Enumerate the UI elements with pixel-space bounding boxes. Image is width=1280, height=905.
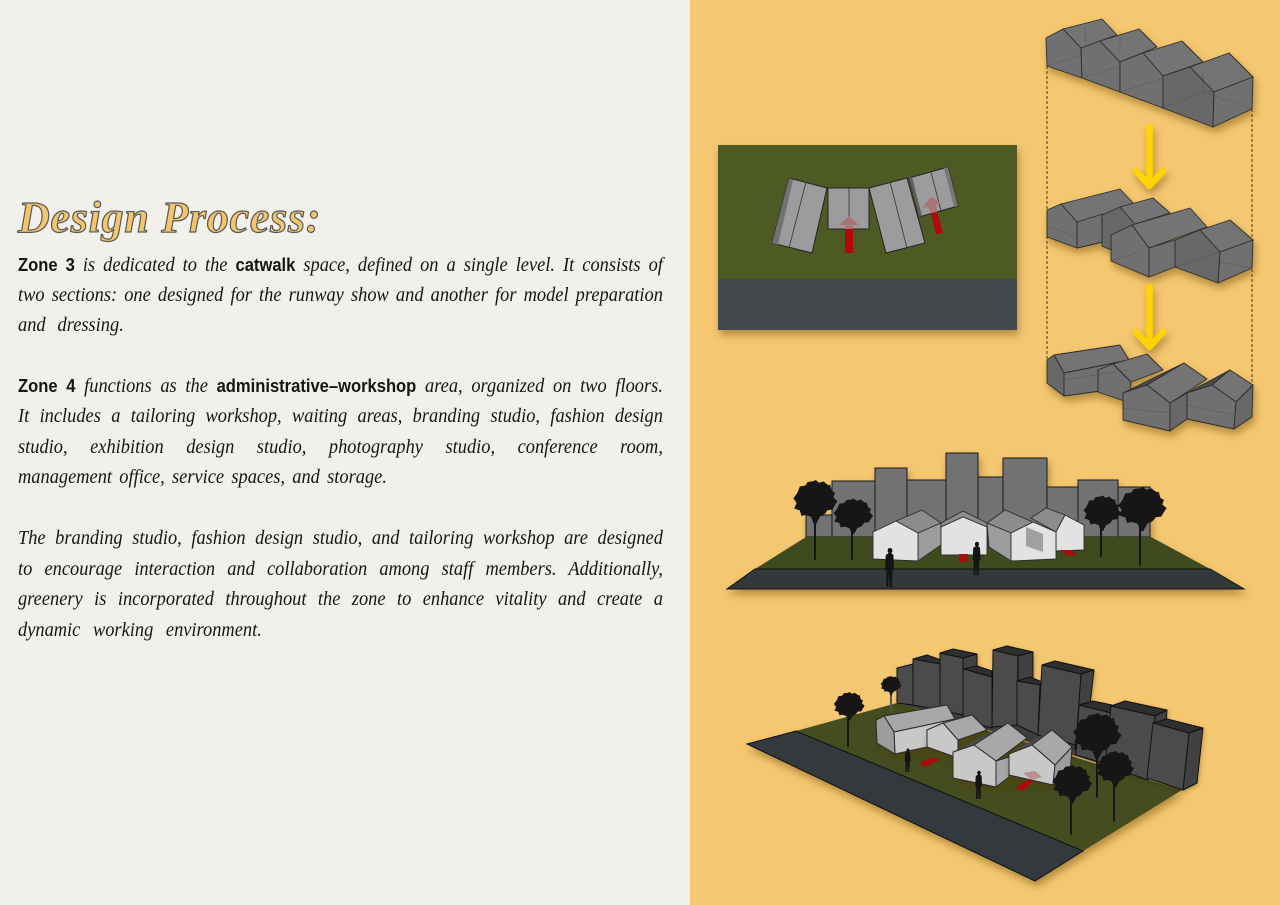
elevation: ground and road <box>727 537 1244 589</box>
text block: zone 3 <box>18 254 665 336</box>
step 1: unit 3 <box>1120 41 1203 108</box>
massing guide lines <box>1047 66 1252 385</box>
step 1: unit 4 <box>1163 53 1253 127</box>
perspective: front trees <box>1053 713 1134 834</box>
arrow: step 1 to 2 <box>1136 127 1163 186</box>
step 3: unit 2 <box>1098 354 1163 403</box>
massing step 2 <box>1047 189 1253 283</box>
text block: zone 4: It includes a tailoring workshop, waiting areas, branding studio, fashion design <box>18 405 663 427</box>
massing step 1 <box>1046 19 1253 127</box>
plan: building 1 <box>772 178 827 253</box>
elevation: house 1 <box>873 510 941 561</box>
text block: collaboration: greenery is incorporated throughout the zone to enhance vitality and create a <box>18 588 663 610</box>
step 3: unit 1 <box>1047 345 1130 396</box>
perspective: house 4 <box>1009 730 1072 785</box>
perspective: ground and road <box>747 703 1182 881</box>
plan: building 2 <box>828 187 869 229</box>
text block: zone 4: studio, exhibition design studio, photography studio, conference room, <box>18 436 663 458</box>
perspective view <box>747 646 1203 881</box>
plan: entrance arrow 2 <box>922 197 943 234</box>
step 2: unit 3 <box>1111 208 1207 277</box>
text block: zone 4: management office, service spaces, and storage. <box>18 466 387 488</box>
perspective: house 3 <box>953 723 1027 787</box>
text block: collaboration <box>18 527 663 641</box>
plan: building 3 <box>869 178 925 253</box>
text block: collaboration: The branding studio, fashion design studio, and tailoring workshop are designed <box>18 527 663 549</box>
plan: building 4 <box>909 167 958 217</box>
elevation: people <box>885 542 981 587</box>
step 2: unit 2 <box>1102 198 1170 250</box>
plan: green ground <box>718 145 1017 279</box>
text block: zone 4: Zone 4 functions as the administrative–workshop area, organized on two floors. <box>18 375 663 397</box>
step 2: unit 4 <box>1175 220 1253 283</box>
perspective: red entrances <box>919 757 1034 791</box>
panel: yellow background <box>690 0 1280 905</box>
text block: zone 4 <box>18 375 663 488</box>
elevation: city backdrop <box>806 453 1150 537</box>
step 3: unit 3 <box>1123 363 1207 431</box>
elevation: red entrances <box>959 550 1078 562</box>
step 1: unit 1 <box>1046 19 1117 78</box>
text block: zone 3: two sections: one designed for the runway show and another for model preparation <box>18 284 663 306</box>
elevation: house 2 <box>941 511 987 555</box>
perspective: house 2 <box>927 715 987 758</box>
site plan <box>718 145 1017 330</box>
text block: collaboration: to encourage interaction and collaboration among staff members. Additionally, <box>18 558 663 580</box>
perspective: people <box>905 749 982 799</box>
panel: text column <box>0 0 690 905</box>
arrow: step 2 to 3 <box>1136 287 1163 347</box>
plan: road <box>718 279 1017 330</box>
elevation: trees <box>793 480 1167 565</box>
perspective: city blocks <box>897 646 1203 790</box>
text block: collaboration: dynamic working environment. <box>18 619 262 641</box>
title: Design Process: <box>18 193 321 242</box>
step 1: unit 2 <box>1081 29 1157 92</box>
text block: zone 3: Zone 3 is dedicated to the catwalk space, defined on a single level. It consists of <box>18 254 663 276</box>
elevation: house 4 <box>1031 508 1084 551</box>
plan: entrance arrow 1 <box>839 216 859 253</box>
massing step 3 <box>1047 345 1253 431</box>
perspective: house 1 <box>876 705 958 754</box>
step 2: unit 1 <box>1047 189 1135 248</box>
elevation view <box>727 453 1244 589</box>
elevation: house 3 <box>987 510 1056 561</box>
text block: zone 3: and dressing. <box>18 314 124 336</box>
perspective: back trees <box>834 676 902 746</box>
step 3: unit 4 <box>1187 370 1253 429</box>
